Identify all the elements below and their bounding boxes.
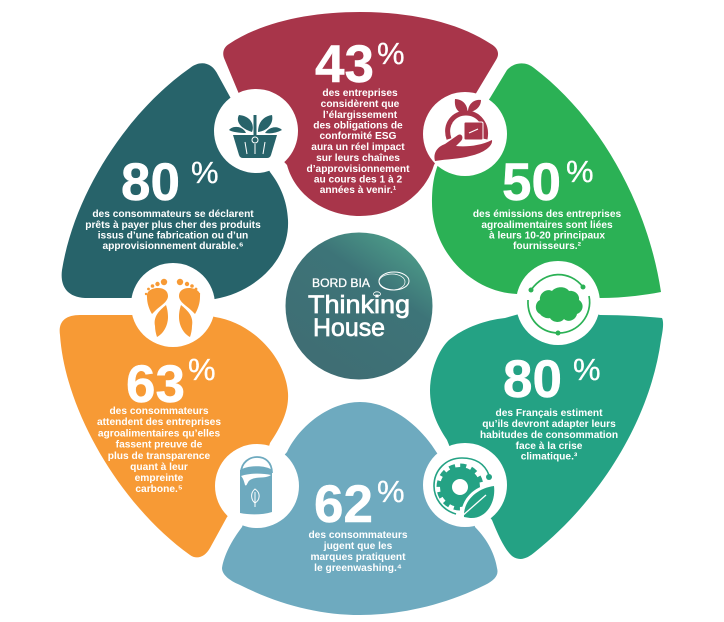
text: orange panel: fassent preuve de	[116, 440, 203, 450]
percent sign: %	[191, 155, 219, 190]
text: orange panel: plus de transparence	[108, 451, 211, 462]
text: red panel	[306, 88, 410, 196]
text: orange panel: empreinte	[135, 473, 184, 484]
icon: hand holding globe and sprout	[423, 92, 507, 176]
number: 80: 80	[121, 153, 180, 212]
panel: green 50%	[432, 63, 661, 303]
icon: gear with leaf	[423, 443, 507, 527]
text: red panel: sur leurs chaînes	[316, 153, 400, 164]
text: green panel	[473, 209, 622, 252]
panel: red 43%	[223, 12, 498, 216]
text: sea green panel: qu’ils devront adapter leurs	[482, 419, 616, 430]
text: blue panel: des consommateurs	[308, 530, 408, 541]
logo: Bord Bia Thinking House: Thinking	[308, 291, 410, 319]
logo: Bord Bia Thinking House: House	[313, 314, 385, 342]
text: red panel: d’approvisionnement	[306, 164, 410, 175]
panel: orange 63%	[60, 305, 288, 557]
number: 63: 63	[126, 355, 185, 414]
text: blue panel: le greenwashing.⁴	[314, 563, 402, 574]
percent sign: %	[573, 352, 601, 387]
text: dark teal panel: des consommateurs se déclarent	[92, 209, 254, 220]
text: sea green panel	[480, 408, 618, 462]
text: green panel: fournisseurs.²	[513, 241, 582, 252]
text: red panel: conformité ESG	[320, 131, 397, 142]
percent sign: %	[188, 352, 216, 387]
text: red panel: années à venir.¹	[320, 185, 397, 196]
text: orange panel: attendent des entreprises	[97, 417, 221, 428]
text: dark teal panel: approvisionnement durable.⁶	[102, 241, 244, 252]
percent sign: %	[377, 36, 405, 71]
text: orange panel: carbone.⁵	[135, 484, 183, 495]
text: green panel: des émissions des entreprises	[473, 209, 622, 220]
icon: basket with leaves	[214, 89, 298, 173]
text: sea green panel: habitudes de consommation	[480, 430, 618, 441]
text: blue panel	[308, 530, 408, 574]
text: dark teal panel	[85, 209, 261, 252]
icon: paint bucket with leaf	[215, 444, 299, 528]
logo: Bord Bia Thinking House	[286, 232, 432, 380]
panel: blue 62%	[222, 402, 498, 615]
logo: Bord Bia Thinking House: BORD BIA	[312, 278, 370, 290]
text: red panel: au cours des 1 à 2	[314, 174, 402, 186]
text: sea green panel: des Français estiment	[495, 408, 603, 419]
text: sea green panel: climatique.³	[521, 452, 578, 462]
text: orange panel: agroalimentaires qu’elles	[98, 428, 220, 440]
percent sign: %	[377, 474, 405, 509]
text: dark teal panel: prêts à payer plus cher des produits	[85, 220, 261, 231]
number: 43: 43	[315, 35, 374, 94]
text: red panel: l’élargissement	[323, 110, 398, 121]
text: red panel: considèrent que	[321, 99, 400, 110]
number: 62: 62	[314, 475, 373, 534]
text: red panel: des obligations de	[313, 120, 403, 132]
text: red panel: des entreprises	[322, 88, 398, 99]
text: dark teal panel: issus d’une fabrication ou d’un	[98, 230, 248, 242]
text: blue panel: jugent que les	[323, 541, 393, 552]
text: red panel: aura un réel impact	[311, 142, 405, 153]
number: 50: 50	[502, 153, 561, 212]
text: orange panel: quant à leur	[130, 462, 188, 473]
text: green panel: agroalimentaires sont liées	[481, 220, 613, 231]
panel: dark teal 80%	[62, 63, 288, 305]
icon: cloud in cycle arrows	[516, 261, 600, 345]
text: blue panel: marques pratiquent	[310, 552, 406, 563]
percent sign: %	[566, 154, 594, 189]
text: green panel: à leurs 10-20 principaux	[489, 230, 605, 242]
text: orange panel	[97, 406, 221, 495]
text: sea green panel: face à la crise	[516, 441, 583, 452]
number: 80: 80	[503, 350, 562, 409]
panel: sea green 80%	[430, 303, 663, 559]
icon: footprints with leaves	[131, 263, 215, 347]
text: orange panel: des consommateurs	[109, 406, 209, 417]
